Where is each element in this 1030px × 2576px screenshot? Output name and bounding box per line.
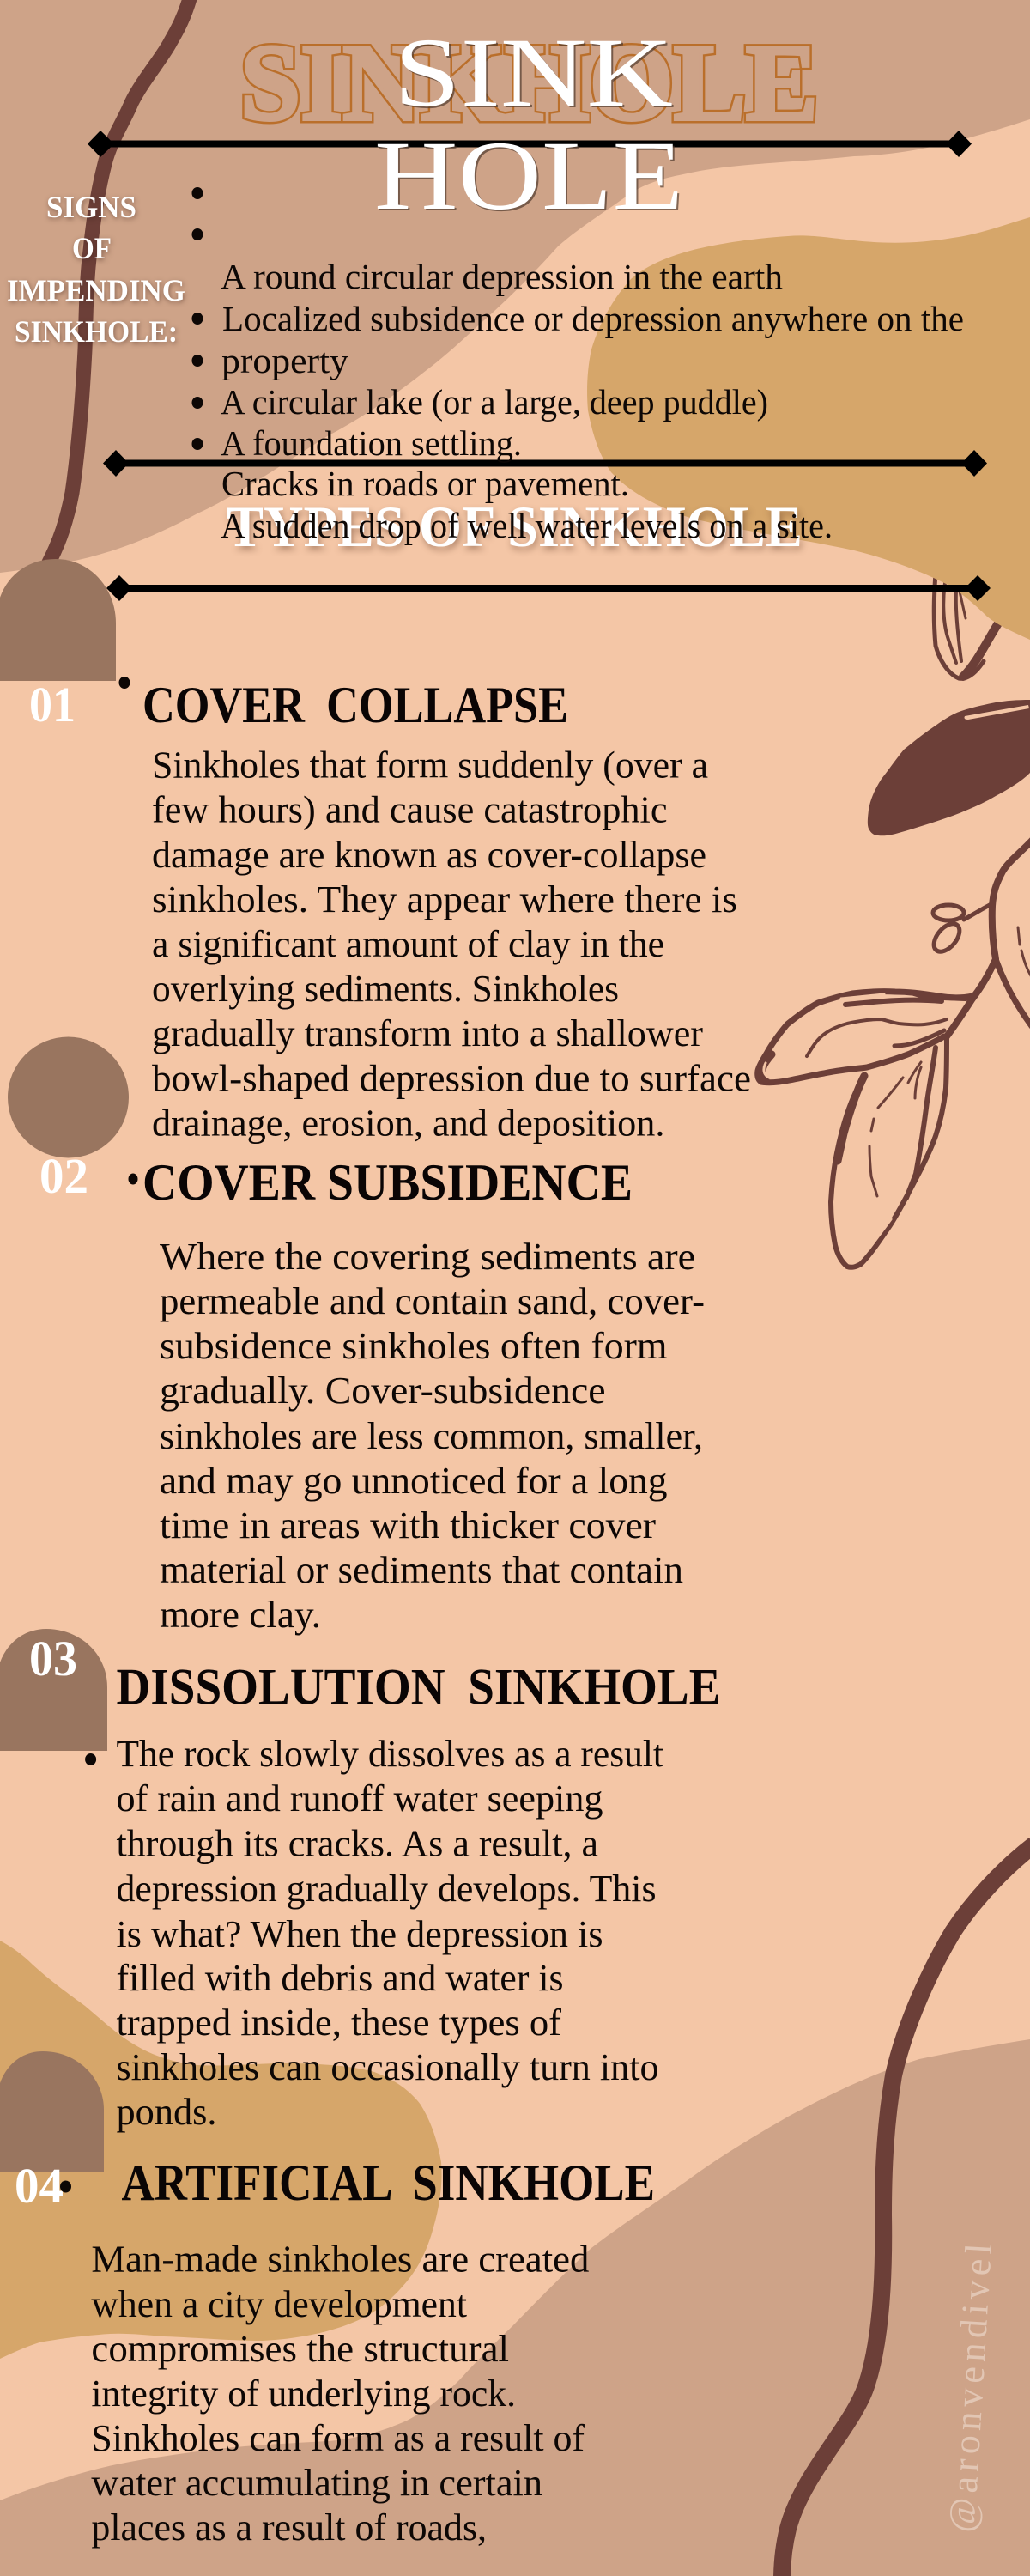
bullet 04 [60, 2181, 71, 2193]
signs list text: property [221, 341, 349, 380]
body: dissolution sinkhole: The rock slowly dissolves as a result [117, 1733, 663, 1775]
background shape: bottom-left tan blob [0, 1941, 442, 2359]
body: cover collapse: sinkholes. They appear where there is [152, 878, 737, 920]
divider: middle [103, 450, 987, 477]
body: artificial sinkhole: compromises the structural [91, 2328, 509, 2370]
body: artificial sinkhole: integrity of underlying rock. [91, 2372, 516, 2415]
body: cover subsidence: subsidence sinkholes often form [160, 1325, 668, 1367]
body: artificial sinkhole: water accumulating in certain [91, 2462, 542, 2504]
body: cover collapse: drainage, erosion, and deposition. [152, 1103, 664, 1144]
body: cover subsidence: Where the covering sediments are [160, 1236, 695, 1278]
background shape: bottom blush [0, 2039, 1030, 2576]
watermark: @aronvendivel: @aronvendivel [941, 2242, 1000, 2534]
body: dissolution sinkhole: sinkholes can occasionally turn into [117, 2046, 659, 2088]
background shape: top-right tan blob [587, 217, 1030, 640]
body: cover subsidence: sinkholes are less common, smaller, [160, 1415, 703, 1457]
number 04: 04 [15, 2158, 64, 2214]
signs list text: A round circular depression in the earth [221, 257, 783, 296]
leaf highlight [965, 705, 1029, 720]
body: cover collapse: overlying sediments. Sinkholes [152, 968, 619, 1010]
signs list text: A sudden drop of well water levels on a site. [221, 506, 833, 545]
body: dissolution sinkhole: ponds. [117, 2091, 216, 2133]
background shape: top blush [0, 0, 1030, 573]
body: cover subsidence [160, 1236, 705, 1636]
title: white two-line word [374, 18, 683, 230]
body: artificial sinkhole: Sinkholes can form as a result of [91, 2417, 585, 2459]
body: dissolution sinkhole [117, 1733, 663, 2133]
body: dissolution sinkhole: trapped inside, these types of [117, 2002, 561, 2044]
sidebar heading: signs of impending sinkhole: OF [72, 231, 112, 265]
number 03: 03 [29, 1631, 77, 1686]
body: dissolution sinkhole: through its cracks. As a result, a [117, 1822, 598, 1865]
body: dissolution sinkhole: of rain and runoff water seeping [117, 1777, 603, 1820]
sidebar heading: signs of impending sinkhole [7, 190, 185, 349]
divider: lower [106, 575, 991, 601]
title: white two-line word: SINK [394, 18, 673, 127]
body: dissolution sinkhole: is what? When the depression is [117, 1913, 603, 1955]
signs list text: Cracks in roads or pavement. [221, 464, 629, 503]
body: cover collapse: a significant amount of clay in the [152, 923, 664, 965]
signs list text [221, 257, 964, 545]
number 01: 01 [29, 677, 76, 732]
body: artificial sinkhole [91, 2239, 589, 2549]
solid dark leaf [868, 700, 1030, 835]
brown curve: top left [49, 0, 191, 562]
body: cover subsidence: and may go unnoticed for a long [160, 1460, 668, 1502]
signs list text: A foundation settling. [221, 423, 522, 463]
leaf stroke highlights [764, 994, 940, 1249]
heading: types of sinkhole: TYPES OF SINKHOLE [227, 494, 803, 559]
badge: arch 04 [0, 2051, 104, 2172]
stem and leaf outlines [758, 840, 1030, 1267]
body: cover collapse: damage are known as cover-collapse [152, 834, 706, 876]
body: dissolution sinkhole: filled with debris and water is [117, 1957, 563, 1999]
botanical illustration: leaves and stem [758, 700, 1030, 1267]
body: cover subsidence: gradually. Cover-subsidence [160, 1370, 606, 1412]
number 02: 02 [39, 1148, 88, 1204]
title: white two-line word: HOLE [374, 121, 683, 230]
signs list bullets [192, 187, 203, 450]
sidebar heading: signs of impending sinkhole: SINKHOLE: [15, 314, 178, 349]
badge: arch 03 [0, 1629, 107, 1751]
body: artificial sinkhole: Man-made sinkholes are created [91, 2239, 589, 2281]
leaf tip behind top blob [934, 558, 1003, 678]
body: artificial sinkhole: when a city development [91, 2283, 467, 2325]
body: cover collapse: gradually transform into a shallower [152, 1012, 703, 1054]
title: outlined background word: SINKHOLE [240, 23, 818, 143]
sidebar heading: signs of impending sinkhole: SIGNS [46, 190, 136, 224]
body: cover subsidence: time in areas with thicker cover [160, 1504, 656, 1546]
brown curve: bottom right [782, 1844, 1030, 2576]
heading: cover subsidence: COVER SUBSIDENCE [142, 1154, 633, 1211]
body: cover collapse: few hours) and cause catastrophic [152, 789, 668, 831]
body: cover collapse: Sinkholes that form suddenly (over a [152, 744, 708, 787]
bullet 01 [118, 677, 130, 689]
badge: circle 02 [8, 1037, 129, 1157]
body: cover subsidence: material or sediments that contain [160, 1549, 683, 1591]
bullet 03 [85, 1753, 96, 1765]
heading: artificial sinkhole: ARTIFICIAL SINKHOLE [122, 2154, 655, 2211]
heading: cover collapse: COVER COLLAPSE [142, 677, 568, 733]
signs list text: A circular lake (or a large, deep puddle) [221, 382, 768, 422]
bullet 02 [129, 1173, 137, 1185]
title: outlined background word: SINKHOLE [240, 23, 818, 143]
body: dissolution sinkhole: depression gradually develops. This [117, 1868, 656, 1910]
sidebar heading: signs of impending sinkhole: IMPENDING [7, 273, 185, 307]
heading: dissolution sinkhole: DISSOLUTION SINKHOLE [117, 1659, 721, 1716]
badge: arch 01 [0, 559, 116, 681]
body: cover collapse [152, 744, 751, 1144]
divider: top [88, 131, 972, 157]
body: cover subsidence: more clay. [160, 1594, 321, 1636]
signs list text: Localized subsidence or depression anywhere on the [222, 299, 964, 338]
body: artificial sinkhole: places as a result of roads, [91, 2506, 487, 2549]
body: cover collapse: bowl-shaped depression due to surface [152, 1058, 751, 1099]
body: cover subsidence: permeable and contain sand, cover- [160, 1280, 705, 1322]
